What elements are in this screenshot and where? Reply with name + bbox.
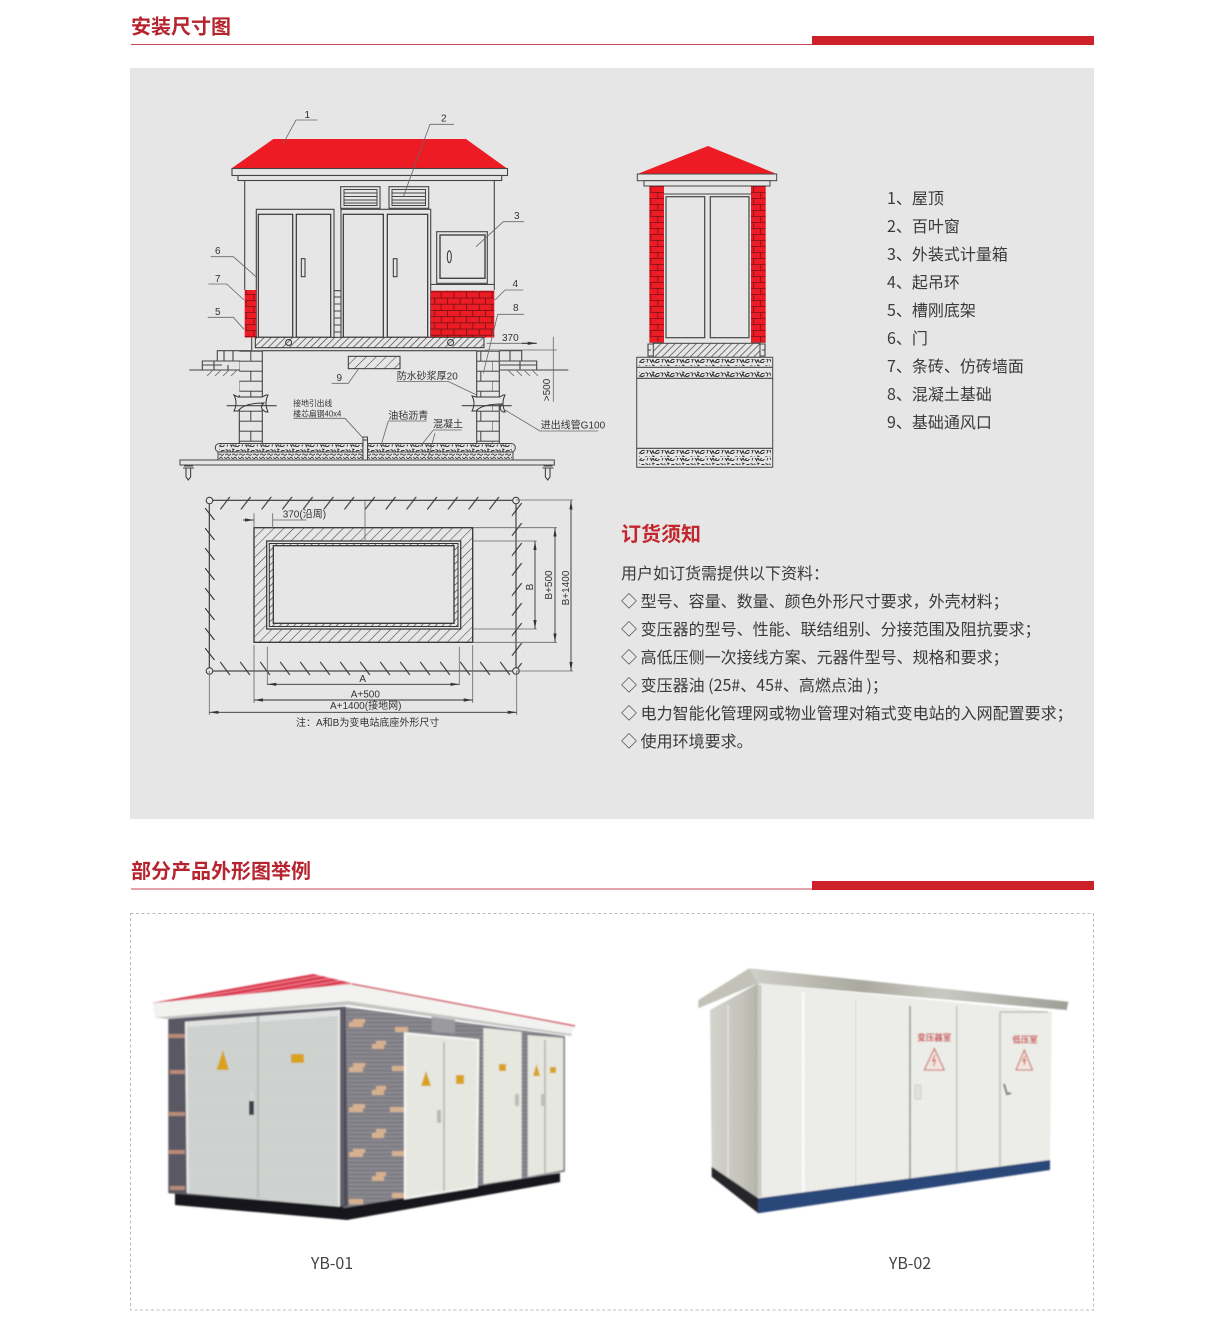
front face bbox=[758, 983, 1052, 1198]
roof bbox=[232, 139, 507, 168]
legend list: 5、槽刚底架 bbox=[887, 297, 976, 321]
drawing annotations: 楼芯扁钢40x4 bbox=[293, 408, 342, 418]
drawing annotations: 油毡沥青 bbox=[388, 409, 428, 422]
label: YB-01: YB-01 bbox=[310, 1250, 353, 1274]
plan labels: B+1400 bbox=[561, 570, 572, 605]
legend list: 2、百叶窗 bbox=[887, 213, 960, 237]
ordering notes heading: 订货须知 bbox=[621, 518, 701, 547]
right door bbox=[341, 209, 431, 338]
part numbers bbox=[215, 110, 520, 384]
section heading: 安装尺寸图 bbox=[131, 10, 1094, 45]
legend list: 7、条砖、仿砖墙面 bbox=[887, 353, 1024, 377]
plan labels: A+1400(接地网) bbox=[330, 699, 401, 712]
ordering notes text: ◇ 高低压侧一次接线方案、元器件型号、规格和要求； bbox=[621, 644, 1009, 668]
dimension 370 and >500 bbox=[485, 333, 557, 402]
roof and eaves bbox=[153, 974, 575, 1036]
plan labels bbox=[283, 508, 572, 729]
legend list bbox=[887, 185, 1024, 433]
legend list: 9、基础通风口 bbox=[887, 409, 992, 433]
part numbers: 1 bbox=[304, 110, 310, 121]
plan labels: B bbox=[525, 583, 536, 590]
large left door bbox=[185, 1010, 340, 1207]
side eaves bbox=[637, 174, 777, 186]
ground plate and stakes bbox=[180, 460, 554, 480]
side doors bbox=[664, 194, 751, 338]
vent bbox=[348, 356, 400, 369]
part numbers: 2 bbox=[441, 114, 447, 125]
drawing annotations bbox=[293, 370, 606, 431]
ordering notes text: ◇ 使用环境要求。 bbox=[621, 728, 753, 752]
warning labels: 低压室 bbox=[1012, 1034, 1038, 1046]
legend list: 3、外装式计量箱 bbox=[887, 241, 1008, 265]
warning labels: 变压器室 bbox=[917, 1032, 952, 1044]
cable pipes bbox=[227, 395, 512, 412]
vent louver bbox=[432, 1017, 455, 1034]
brick wall bbox=[245, 290, 494, 338]
louvers bbox=[341, 187, 429, 208]
left door bbox=[256, 209, 334, 338]
plan labels: A bbox=[359, 674, 366, 685]
section heading: 部分产品外形图举例: 部分产品外形图举例 bbox=[131, 855, 311, 884]
channel steel base bbox=[252, 337, 488, 351]
grounding grid bbox=[205, 497, 524, 675]
drawing annotations: 接地引出线 bbox=[293, 398, 332, 408]
concrete base bbox=[215, 437, 515, 460]
base bbox=[175, 1173, 560, 1220]
legend list: 6、门 bbox=[887, 325, 928, 349]
dimension 370 and >500: >500 bbox=[542, 378, 553, 401]
ordering notes text: 用户如订货需提供以下资料： bbox=[621, 560, 829, 584]
plan labels: B+500 bbox=[544, 570, 555, 600]
steel roof bbox=[698, 968, 1068, 1010]
warning labels bbox=[917, 1032, 1038, 1070]
side base bbox=[637, 343, 773, 467]
plan labels: A+500 bbox=[351, 690, 380, 701]
photo: YB-01 unit bbox=[153, 974, 575, 1220]
legend list: 4、起吊环 bbox=[887, 269, 960, 293]
diagram: plan view bbox=[205, 497, 573, 729]
section heading: 安装尺寸图: 安装尺寸图 bbox=[131, 10, 231, 40]
panel: installation dimensions bbox=[130, 68, 1094, 819]
plan labels: 370(沿周) bbox=[283, 508, 326, 520]
ordering notes text: ◇ 电力智能化管理网或物业管理对箱式变电站的入网配置要求； bbox=[621, 700, 1073, 724]
legend list: 1、屋顶 bbox=[887, 185, 944, 209]
ordering notes text bbox=[621, 560, 1073, 752]
side brick columns bbox=[649, 186, 766, 343]
part numbers: 9 bbox=[336, 373, 342, 384]
ordering notes text: ◇ 变压器的型号、性能、联结组别、分接范围及阻抗要求； bbox=[621, 616, 1041, 640]
drawing annotations: 进出线管G100 bbox=[541, 418, 606, 431]
foundation walls bbox=[189, 351, 568, 443]
side tan bricks bbox=[168, 1034, 185, 1190]
front doors bbox=[405, 1028, 563, 1198]
left brick strip bbox=[168, 1007, 343, 1207]
part numbers: 4 bbox=[512, 279, 518, 290]
eaves bbox=[232, 168, 508, 180]
plan dimensions bbox=[209, 500, 573, 715]
ordering notes text: ◇ 变压器油 (25#、45#、高燃点油 )； bbox=[621, 672, 888, 696]
diagram: side elevation bbox=[637, 146, 777, 467]
label: YB-02: YB-02 bbox=[888, 1250, 931, 1274]
drawing annotations: 防水砂浆厚20 bbox=[397, 370, 458, 382]
tan bricks bbox=[349, 1019, 408, 1204]
part numbers: 6 bbox=[215, 246, 221, 257]
plan labels: 注：A和B为变电站底座外形尺寸 bbox=[296, 716, 439, 729]
photo: YB-02 unit bbox=[698, 968, 1068, 1213]
foundation footprint bbox=[254, 528, 473, 642]
part numbers: 8 bbox=[513, 303, 519, 314]
dimension 370 and >500: 370 bbox=[502, 333, 519, 344]
right brick face bbox=[343, 1007, 565, 1208]
diagram: front elevation bbox=[180, 110, 606, 480]
drawing annotations: 混凝土 bbox=[433, 418, 463, 430]
side roof bbox=[637, 146, 777, 174]
section heading: 部分产品外形图举例 bbox=[131, 855, 1094, 890]
ordering notes text: ◇ 型号、容量、数量、颜色外形尺寸要求，外壳材料； bbox=[621, 588, 1009, 612]
part numbers: 3 bbox=[514, 211, 520, 222]
panel: product examples bbox=[130, 914, 1094, 1310]
meter box bbox=[437, 232, 487, 283]
legend list: 8、混凝土基础 bbox=[887, 381, 992, 405]
part numbers: 7 bbox=[215, 274, 221, 285]
base band bbox=[712, 1160, 1050, 1213]
yellow signs bbox=[216, 1050, 556, 1086]
part numbers: 5 bbox=[215, 307, 221, 318]
leader lines bbox=[208, 120, 598, 458]
side face bbox=[710, 983, 758, 1213]
